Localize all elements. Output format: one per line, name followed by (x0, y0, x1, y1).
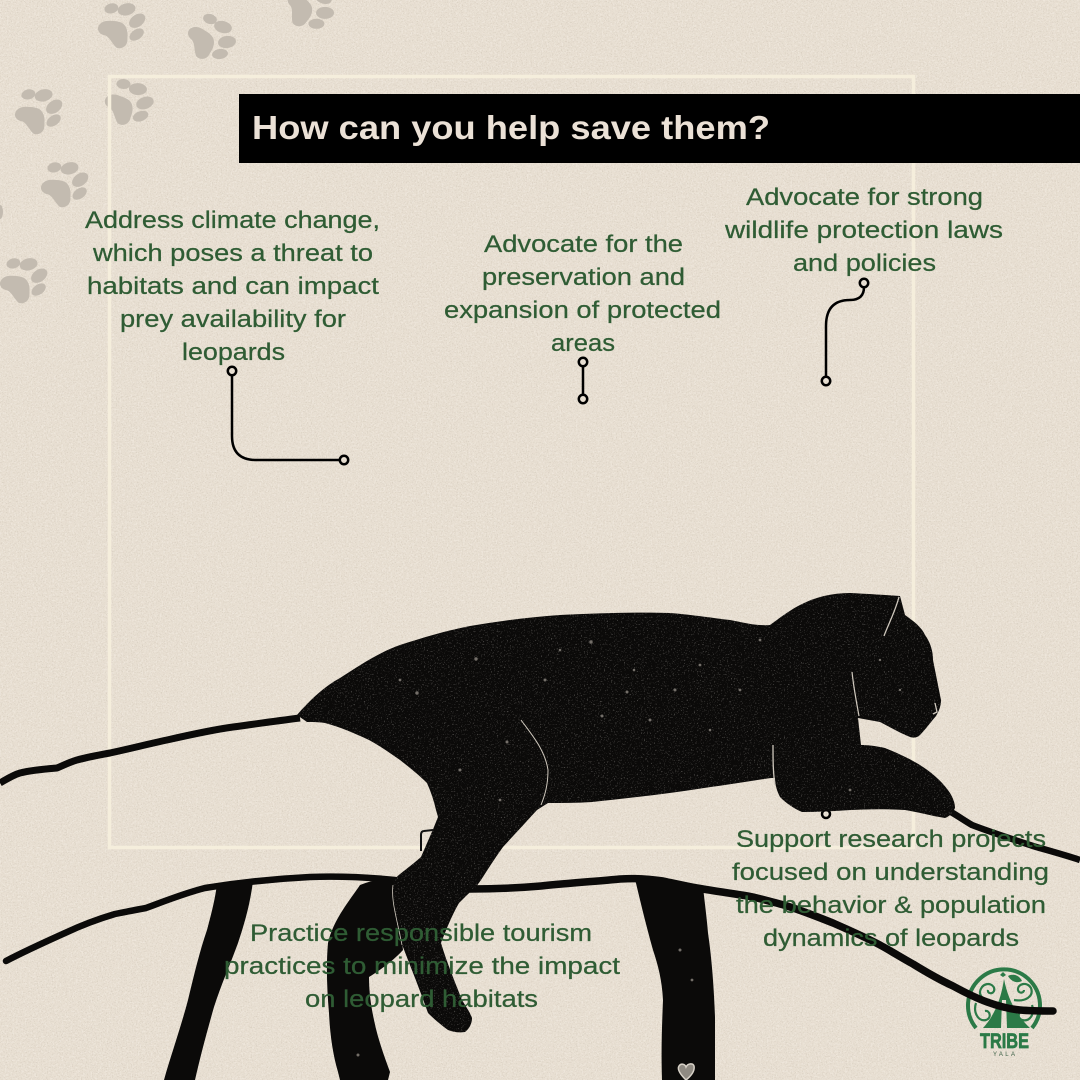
title banner: How can you help save them? (252, 109, 770, 146)
title banner (239, 94, 1080, 163)
text: research projects: the behavior & population (736, 892, 1046, 919)
fur highlights (393, 597, 937, 945)
logo subtitle: YALA (993, 1052, 1015, 1058)
text: responsible tourism: practices to minimize the impact (224, 953, 620, 980)
text: protected areas: Advocate for the (484, 231, 683, 258)
cream frame (110, 76, 914, 848)
branch: tail (0, 718, 300, 783)
logo: Tribe Yala (968, 969, 1040, 1058)
text: protected areas: preservation and (482, 264, 685, 291)
text: research projects (732, 826, 1049, 952)
icon: heart on paw (678, 1064, 694, 1080)
text: protected areas: expansion of protected (444, 297, 721, 324)
text: research projects: dynamics of leopards (763, 925, 1019, 952)
text: climate change: Address climate change, (85, 207, 380, 234)
hind leg: far left (164, 881, 253, 1080)
arm claw branch (951, 812, 1080, 860)
leopard illustration (0, 590, 1080, 1080)
text: responsible tourism (224, 920, 620, 1013)
hind leg: second (327, 879, 403, 1080)
branch: front right (470, 879, 1053, 1011)
logo wordmark: TRIBE (980, 1030, 1029, 1053)
connector: tourism stub (421, 830, 433, 851)
text: protection laws: and policies (793, 250, 936, 277)
text: protection laws (724, 184, 1003, 277)
text: climate change: leopards (182, 339, 285, 366)
connector: research stub (822, 810, 830, 818)
text: responsible tourism: Practice responsible tourism (250, 920, 592, 947)
text: protected areas: areas (551, 330, 615, 357)
text: responsible tourism: on leopard habitats (305, 986, 538, 1013)
text: research projects: Support research projects (736, 826, 1046, 853)
text: climate change: habitats and can impact (87, 273, 379, 300)
text: protection laws: wildlife protection laws (724, 217, 1003, 244)
text: protected areas (444, 231, 721, 357)
connector: climate change (228, 367, 348, 464)
connector: protected areas (579, 358, 587, 403)
fur grain (290, 590, 960, 1040)
paw prints trail (0, 0, 339, 310)
body and head silhouette (297, 593, 955, 1032)
branch: back left (6, 877, 395, 961)
text: climate change: which poses a threat to (92, 240, 373, 267)
text: research projects: focused on understanding (732, 859, 1049, 886)
fur specks (356, 639, 901, 1056)
text: climate change: prey availability for (120, 306, 346, 333)
text: climate change (85, 207, 380, 366)
text: protection laws: Advocate for strong (746, 184, 983, 211)
connector: protection laws (822, 279, 868, 385)
front leg column (635, 878, 715, 1080)
logo emblem (968, 969, 1040, 1028)
